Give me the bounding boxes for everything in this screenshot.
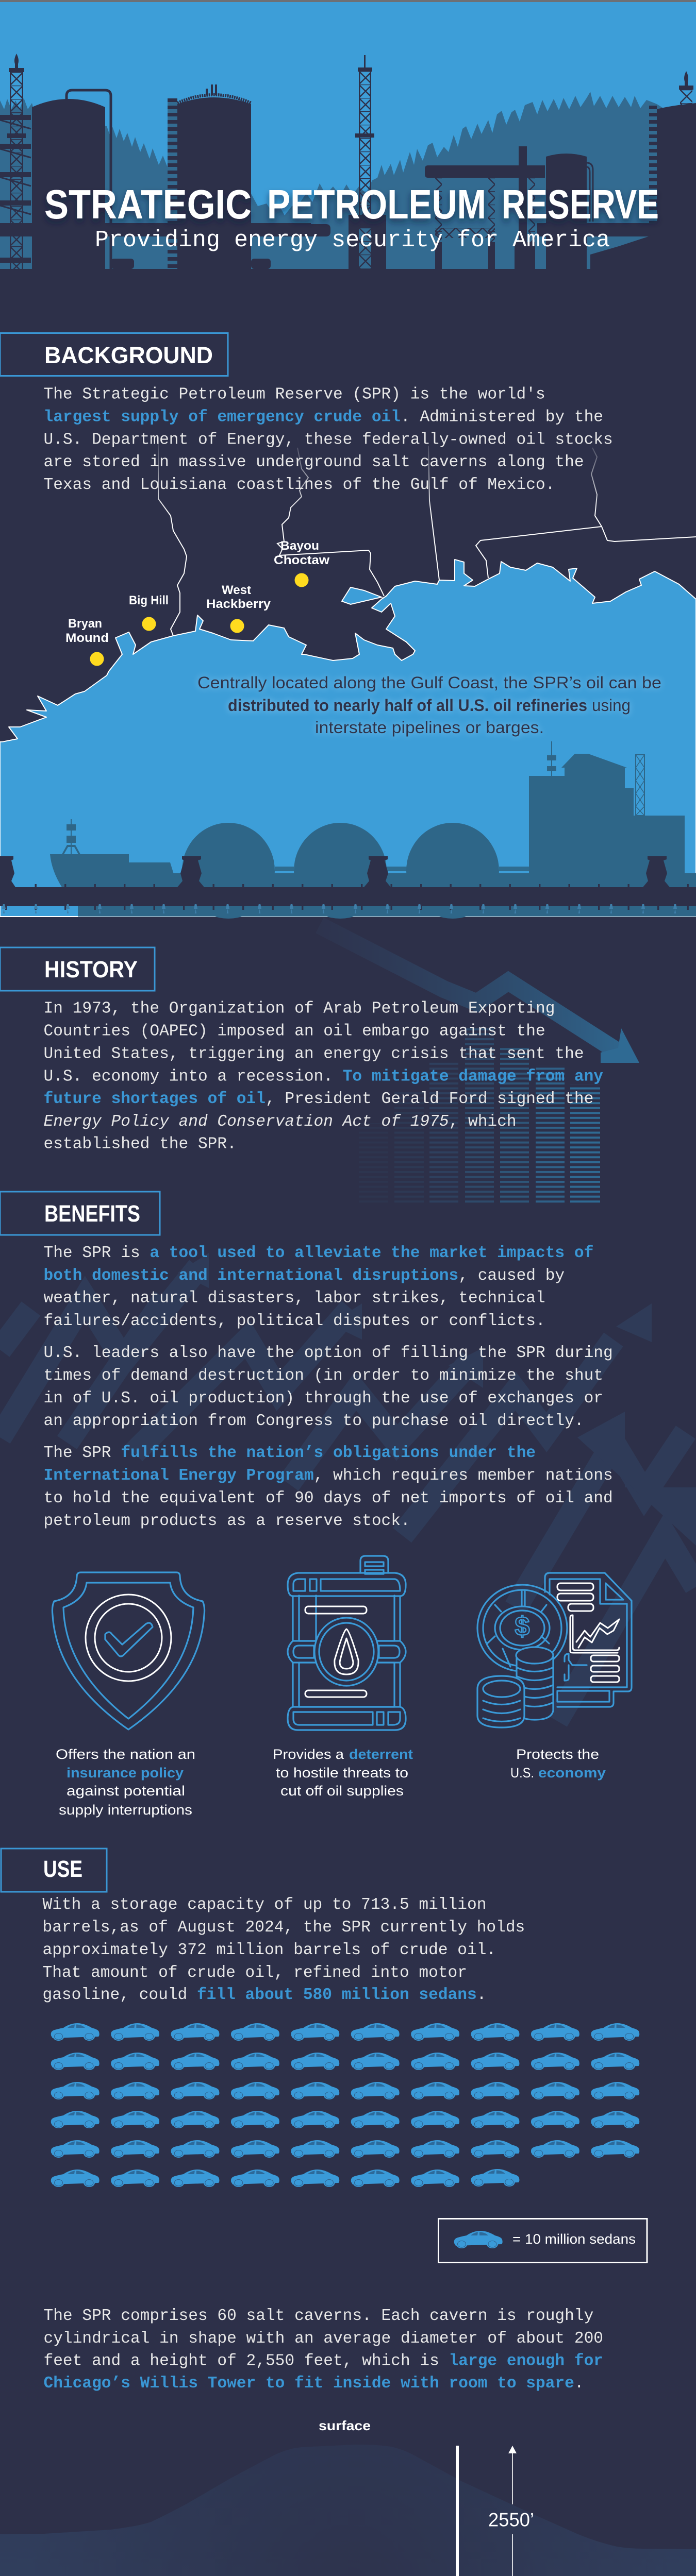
subtitle: Providing energy security for America [95,227,610,253]
body text: benefits 1: , caused by [458,1267,565,1285]
icon: coins and report [477,1573,632,1727]
panel: header illustration [0,0,696,310]
lake [342,587,382,604]
dimension: 2550 feet [488,2446,534,2576]
body text: background 2: U.S. Department of Energy, these federally-owned oil stocks [43,431,613,449]
left scaffold [0,115,31,263]
body text: benefits 1: The SPR is a tool used to alleviate the market impacts of [43,1244,593,1262]
site labels [65,539,329,645]
caption: deterrent [273,1747,413,1799]
panel: background section [0,333,696,919]
body text: benefits 1: weather, natural disasters, labor strikes, technical [43,1289,545,1308]
title: STRATEGIC [44,181,252,227]
background chevron arrows [0,1253,696,1721]
background arrow and bars [320,925,639,1204]
body text: history: , which [449,1113,517,1131]
body text: background 2: are stored in massive underground salt caverns along the [43,453,584,471]
body text: use: With a storage capacity of up to 713.5 million [42,1896,486,1914]
site labels: Hackberry [206,597,271,611]
body text: history: Energy Policy and Conservation Act of 1975 [43,1113,449,1131]
left tank [32,99,105,269]
title: PETROLEUM [267,181,486,227]
site labels: West [222,583,251,597]
caption: economy: Protects the [516,1747,599,1762]
body text: benefits 3: petroleum products as a reserve stock. [43,1512,410,1530]
label: surface: surface [319,2418,371,2433]
state lines [158,443,696,636]
panel: history section [0,925,639,1204]
body text: use: approximately 372 million barrels of crude oil. [42,1941,496,1959]
legend: = 10 million sedans [512,2231,636,2247]
body text: use: gasoline, could [42,1986,197,2004]
body text: salt caverns: large enough for [449,2352,603,2370]
caption: economy [510,1747,606,1781]
body text: salt caverns: The SPR comprises 60 salt caverns. Each cavern is roughly [43,2307,593,2325]
body text: benefits 3: , which requires member nations [314,1467,613,1485]
pictogram: car grid [51,2023,639,2187]
site labels: Mound [65,631,109,645]
panel: benefits section [0,1192,696,1818]
body text: history: U.S. economy into a recession. [43,1067,343,1086]
dimension: 2550 feet: 2550’ [488,2509,534,2531]
title [44,181,659,227]
body text: use: barrels,as of August 2024, the SPR currently holds [42,1919,525,1937]
body text: benefits 2: U.S. leaders also have the option of filling the SPR during [43,1344,613,1362]
lattice tower left [10,72,23,269]
map of the gulf coast [0,443,696,917]
body text: benefits 2: in of U.S. oil production) through the use of exchanges or [43,1389,603,1408]
heading: use: USE [43,1856,82,1882]
caption: deterrent: to hostile threats to [276,1765,408,1781]
heading: history: HISTORY [44,956,138,982]
icon: oil barrel [288,1556,406,1730]
lattice tower centre [359,71,371,269]
forest silhouette [0,92,696,269]
title: RESERVE [502,181,659,227]
body text: salt caverns: feet and a height of 2,550 feet, which is [43,2352,449,2370]
caption: economy: U.S. [510,1765,534,1781]
right equipment [425,165,545,178]
heading: background [0,333,228,376]
body text: use: That amount of crude oil, refined into motor [42,1964,467,1982]
body text: benefits 3: to hold the equivalent of 90 days of net imports of oil and [43,1489,613,1507]
caption: deterrent: Provides a [273,1747,344,1762]
body text: salt caverns: Chicago’s Willis Tower to fit inside with room to spare [43,2375,574,2393]
lower pipe [0,223,330,236]
right tank and tower [657,103,696,269]
site labels: Big Hill [129,594,169,607]
heading: history [0,947,155,991]
caption: deterrent: cut off oil supplies [280,1783,404,1799]
legend [438,2218,647,2263]
caption: economy: economy [538,1765,606,1781]
ground [0,269,696,310]
body text: benefits 2: an appropriation from Congress to purchase oil directly. [43,1412,584,1430]
caption: insurance policy: Offers the nation an [56,1747,195,1762]
salt dome [0,2445,696,2576]
body text: benefits 2: times of demand destruction (in order to minimize the shut [43,1367,603,1385]
body text: benefits 3: The SPR fulfills the nation’s obligations under the [43,1444,536,1462]
body text: benefits 1: failures/accidents, political disputes or conflicts. [43,1312,545,1330]
body text: benefits 3: International Energy Program [43,1467,314,1485]
chart: cavern size comparison [0,2418,696,2576]
panel: use section [0,1849,696,2576]
caption: deterrent: deterrent [349,1747,413,1762]
illustration: storage facility skyline [50,741,696,919]
body text: background: The Strategic Petroleum Reserve (SPR) is the world's [43,385,545,403]
site labels: Bayou [280,539,319,553]
body text: background 2: largest supply of emergency crude oil. Administered by the [43,408,603,426]
body text: history: , President Gerald Ford signed the [266,1090,593,1108]
caption: insurance policy: supply interruptions [59,1802,192,1818]
site labels: Choctaw [274,553,329,567]
caption: insurance policy [56,1747,195,1818]
site markers [90,573,308,666]
second tank [177,97,251,269]
body text: history: Countries (OAPEC) imposed an oil embargo against the [43,1022,545,1041]
body text: use: fill about 580 million sedans. [197,1986,486,2004]
body text: history: established the SPR. [43,1136,237,1154]
heading: use [1,1849,107,1892]
callout: gulf coast distribution [197,673,661,737]
callout: gulf coast distribution: Centrally located along the Gulf Coast, the SPR’s oil can be [197,673,661,692]
icon: coins and report: $ [515,1612,530,1641]
body text: history: To mitigate damage from any [343,1067,603,1086]
body text: history: In 1973, the Organization of Arab Petroleum Exporting [43,999,555,1018]
body text: benefits 1: both domestic and international disruptions [43,1267,458,1285]
body text: salt caverns: cylindrical in shape with an average diameter of about 200 [43,2330,603,2348]
heading: background: BACKGROUND [44,342,213,368]
site labels: Bryan [68,617,102,631]
callout: gulf coast distribution: using [592,696,631,715]
caption: insurance policy: against potential [67,1783,185,1799]
heading: benefits: BENEFITS [44,1200,140,1227]
ladders [168,98,177,269]
cavern [433,2446,478,2576]
heading: benefits [0,1192,160,1235]
caption: insurance policy: insurance policy [67,1765,184,1781]
body text: salt caverns: . [574,2375,584,2393]
icon: shield with check [52,1572,205,1730]
callout: gulf coast distribution: distributed to nearly half of all U.S. oil refineries [228,696,587,715]
illustration: pipeline with valves [0,856,696,917]
callout: gulf coast distribution: interstate pipelines or barges. [315,718,544,737]
body text: background 2: Texas and Louisiana coastlines of the Gulf of Mexico. [43,476,555,494]
body text: history: United States, triggering an energy crisis that sent the [43,1045,584,1063]
body text: history: future shortages of oil [43,1090,266,1108]
